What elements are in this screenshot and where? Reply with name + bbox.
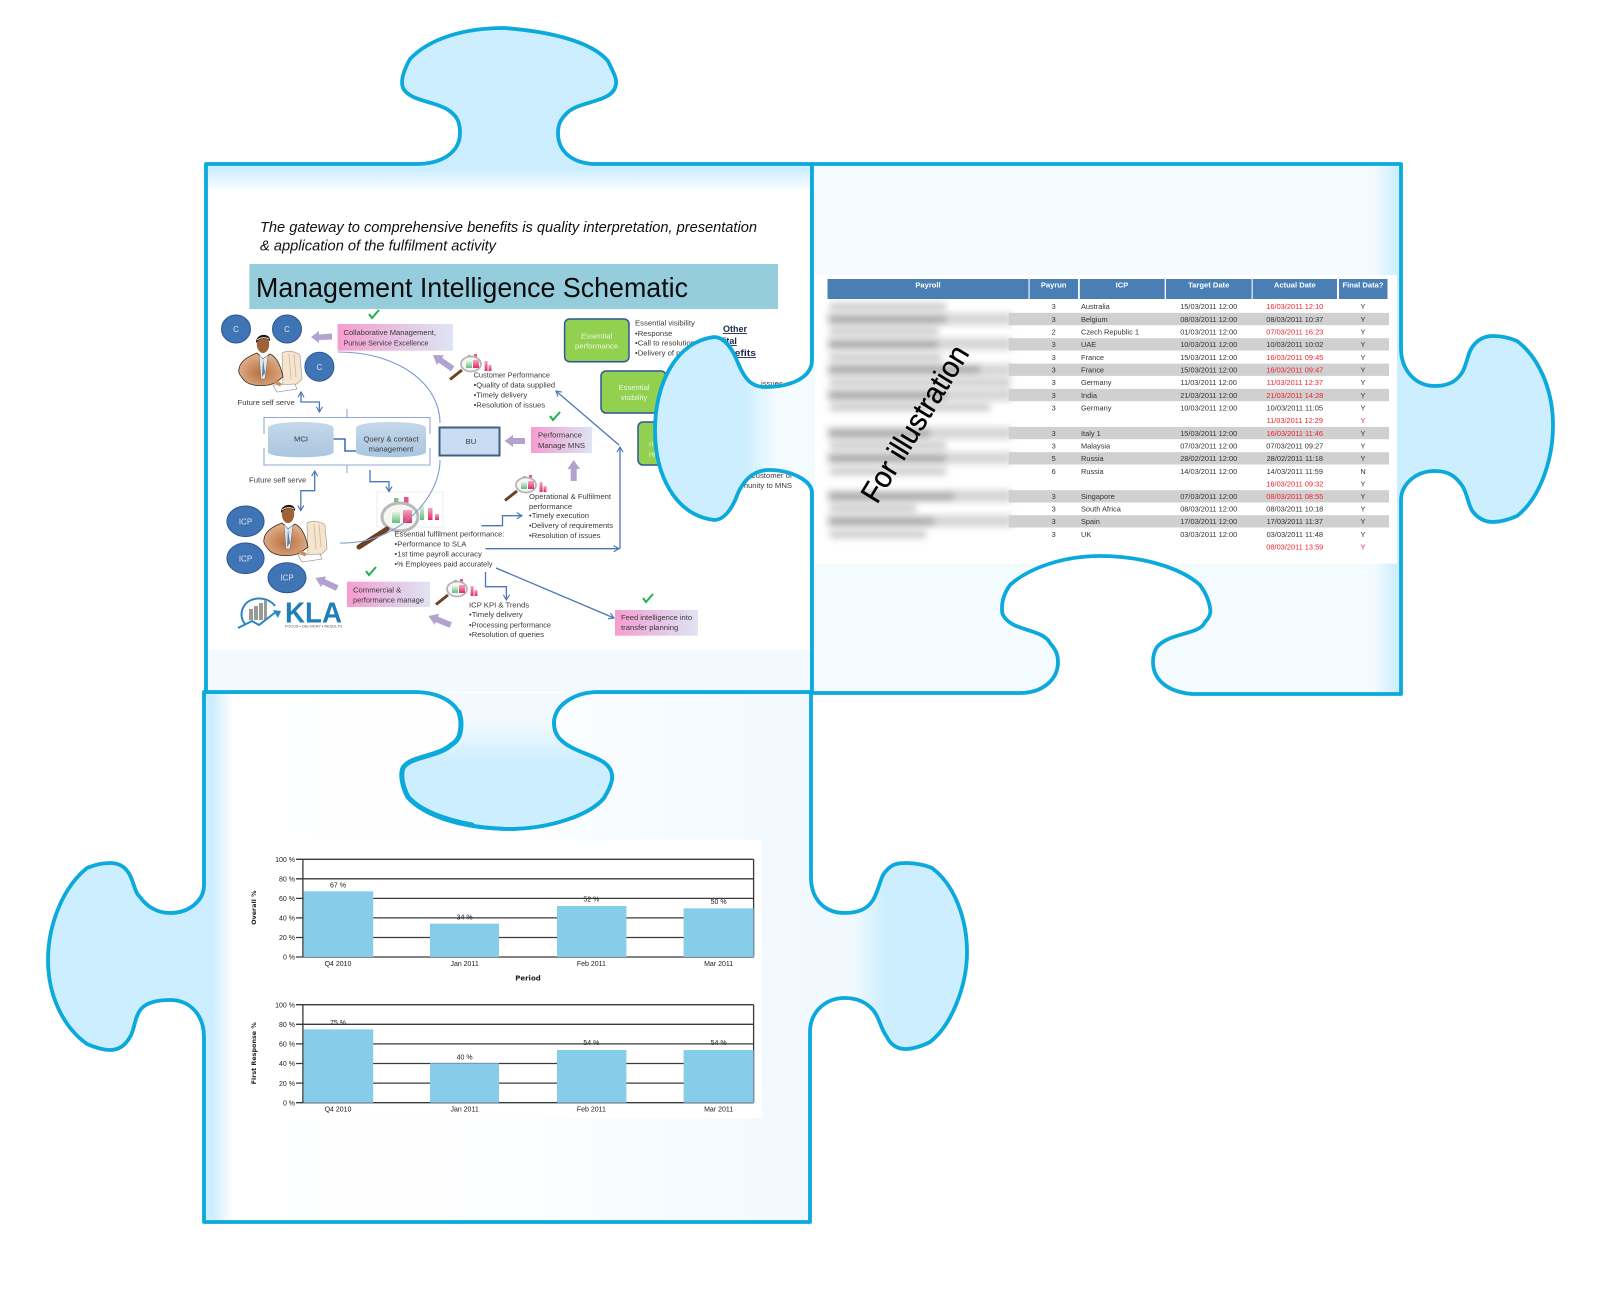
- value labels: 34 %: [457, 914, 473, 921]
- C circles: C: [233, 325, 239, 334]
- text: operational and fulfilment: •Delivery of requirements: [529, 521, 613, 530]
- table rows: Y: [1361, 391, 1366, 400]
- table rows: 3: [1052, 315, 1056, 324]
- y axis labels: 0 %: [283, 955, 295, 962]
- chart: Overall %: [250, 857, 754, 982]
- green box: essential visibility: visibility: [621, 393, 647, 402]
- box: commercial and performance manage: [347, 582, 430, 607]
- table rows: Italy 1: [1081, 429, 1101, 438]
- table rows: 16/03/2011 09:32: [1266, 480, 1323, 488]
- piece body: bottom: [48, 692, 967, 1222]
- table rows: 11/03/2011 12:00: [1180, 378, 1237, 387]
- table rows: Y: [1361, 328, 1366, 336]
- outline: table piece: [655, 164, 1553, 694]
- table rows: 21/03/2011 14:28: [1266, 391, 1323, 400]
- arrow: customer performance to collaborative: [430, 350, 456, 374]
- value labels: 54 %: [583, 1040, 599, 1047]
- white panel behind table: [815, 275, 1397, 564]
- category labels: Feb 2011: [577, 1107, 606, 1114]
- slide heading sentence: The gateway to comprehensive benefits is quality interpretation, presentation: [260, 220, 757, 236]
- slide heading sentence: & application of the fulfilment activity: [260, 238, 498, 254]
- table rows: Y: [1361, 442, 1366, 450]
- table rows: Singapore: [1081, 492, 1115, 501]
- table rows: Australia: [1081, 302, 1111, 311]
- table rows: 14/03/2011 12:00: [1180, 467, 1237, 476]
- blurred payroll names: [827, 303, 1012, 538]
- table rows: 08/03/2011 08:55: [1266, 492, 1323, 501]
- y axis labels: [275, 857, 295, 962]
- table rows: 11/03/2011 12:29: [1267, 416, 1323, 425]
- blue arrows: flow lines: [301, 391, 620, 618]
- table rows: 16/03/2011 12:10: [1266, 302, 1323, 311]
- data store: MCI: MCI: [294, 435, 308, 444]
- table rows: 16/03/2011 09:45: [1266, 353, 1323, 362]
- text: partly hidden notes: community to MNS: [727, 481, 792, 490]
- green box: partly hidden: [638, 422, 703, 465]
- table rows: 08/03/2011 12:00: [1180, 504, 1237, 514]
- y axis labels: [275, 1002, 295, 1107]
- value labels: [330, 882, 727, 921]
- piece body: schematic: [206, 28, 812, 692]
- text: operational and fulfilment: Operational & Fulfilment: [529, 492, 612, 501]
- y axis labels: 20 %: [279, 1081, 295, 1088]
- gridlines: [296, 1005, 754, 1103]
- box: feed intelligence: transfer planning: [621, 623, 678, 632]
- y axis labels: 100 %: [275, 857, 295, 864]
- value labels: 54 %: [711, 1040, 727, 1047]
- table rows: 3: [1052, 504, 1056, 514]
- arrow: operational to performance manage: [567, 460, 580, 481]
- icon: magnified chart (operational): [505, 473, 549, 500]
- table rows: 3: [1052, 366, 1056, 374]
- table rows: 5: [1052, 454, 1056, 463]
- table rows: Germany: [1081, 378, 1112, 387]
- table rows: 03/03/2011 12:00: [1180, 530, 1237, 539]
- text: partly hidden notes: issues: [761, 379, 783, 388]
- value labels: 52 %: [583, 897, 599, 904]
- table rows: 2: [1052, 328, 1056, 336]
- table rows: 08/03/2011 12:00: [1180, 315, 1237, 324]
- table rows: Czech Republic 1: [1081, 328, 1139, 336]
- table rows: Y: [1361, 302, 1366, 311]
- arrow: commercial to ICP: [313, 573, 340, 594]
- text: other vital benefits: Other: [723, 324, 748, 334]
- table rows: 07/03/2011 12:00: [1180, 442, 1237, 450]
- connector between data stores: [334, 439, 356, 451]
- tab fill reaching down from the schematic piece: [402, 693, 612, 829]
- table header: Target Date: [1188, 280, 1229, 290]
- arrow: future self serve to data store: [301, 392, 319, 412]
- text: ICP KPI and trends: ICP KPI & Trends: [469, 600, 529, 609]
- text: other vital benefits: Benefits: [715, 348, 756, 358]
- table rows: Y: [1361, 378, 1366, 387]
- y axis labels: 100 %: [275, 1002, 295, 1009]
- y axis labels: 40 %: [279, 1061, 295, 1068]
- table rows: Malaysia: [1081, 442, 1111, 450]
- icon: person at computer (top): [239, 335, 302, 392]
- category labels: Jan 2011: [450, 1107, 479, 1114]
- green box: partly hidden: re: [649, 450, 656, 459]
- table rows: 3: [1052, 429, 1056, 438]
- data store: MCI: [268, 422, 334, 457]
- text: essential visibility list: •Call to resolution: [635, 339, 695, 348]
- text: customer performance: •Resolution of issues: [474, 400, 545, 409]
- box: performance manage MNS: Manage MNS: [538, 441, 585, 450]
- green box: essential visibility: [601, 371, 666, 413]
- table rows: 3: [1052, 391, 1056, 400]
- table rows: Russia: [1081, 454, 1104, 463]
- table rows: 16/03/2011 11:46: [1267, 429, 1323, 438]
- table rows: Y: [1361, 353, 1366, 362]
- bars: [304, 1029, 754, 1103]
- table rows: 3: [1052, 353, 1056, 362]
- table rows: 08/03/2011 10:18: [1266, 504, 1323, 514]
- slide title: Management Intelligence Schematic: [256, 272, 688, 303]
- value labels: 75 %: [330, 1020, 346, 1027]
- text: customer performance: Customer Performance: [474, 371, 550, 380]
- category labels: Jan 2011: [450, 961, 479, 968]
- value labels: 50 %: [711, 899, 727, 906]
- curved link: [338, 352, 440, 543]
- text: ICP KPI and trends: •Timely delivery: [469, 610, 523, 619]
- table rows: 28/02/2011 11:18: [1267, 454, 1323, 463]
- logo: KLA: KLA: [285, 598, 342, 630]
- green box: essential performance: Essential: [581, 331, 612, 340]
- icon: person at computer (lower): [264, 505, 327, 562]
- table rows: Y: [1361, 416, 1366, 425]
- table rows: 17/03/2011 12:00: [1180, 517, 1237, 526]
- puzzle piece: payroll table: [655, 164, 1553, 694]
- table rows: Y: [1361, 542, 1366, 552]
- y axis labels: 60 %: [279, 1042, 295, 1049]
- outline: bottom piece: [48, 692, 967, 1222]
- BU box: BU: [466, 437, 476, 446]
- ICP circles: ICP: [239, 554, 252, 563]
- puzzle piece: management intelligence schematic: [204, 28, 812, 829]
- table rows: Y: [1361, 404, 1366, 412]
- ICP circles: ICP: [280, 574, 294, 583]
- table rows: France: [1081, 366, 1104, 374]
- table rows: 08/03/2011 10:37: [1266, 315, 1323, 324]
- gridlines: [296, 859, 754, 957]
- table rows: 3: [1052, 530, 1056, 539]
- box: performance manage MNS: Performance: [538, 431, 582, 440]
- box: commercial and performance manage: performance manage: [353, 595, 424, 604]
- box: collaborative management: Pursue Service Excellence: [344, 338, 428, 347]
- text: essential visibility list: Essential visibility: [635, 319, 695, 328]
- text: other vital benefits: Vital: [718, 336, 737, 346]
- green box: essential visibility: Essential: [618, 383, 650, 392]
- table rows: UK: [1081, 530, 1091, 539]
- arrow: performance manage to BU: [504, 435, 525, 447]
- value labels: [330, 1020, 727, 1061]
- table rows: N: [1360, 467, 1366, 476]
- logo: KLA: FOCUS ▪ DELIVERY ▪ RESULTS: [285, 624, 342, 628]
- text: partly hidden notes: Customer of: [750, 471, 793, 480]
- C circles: C: [284, 325, 290, 334]
- outline: schematic piece: [206, 28, 812, 692]
- bars: [304, 891, 754, 957]
- category labels: Mar 2011: [704, 961, 733, 968]
- check mark: [550, 412, 560, 420]
- box: performance manage MNS: [531, 427, 592, 453]
- table rows: Y: [1361, 340, 1366, 349]
- table rows: 21/03/2011 12:00: [1180, 391, 1237, 400]
- pale strip under the slide: [206, 650, 812, 692]
- data store: query and contact management: Query & contact: [363, 435, 419, 444]
- text: essential visibility list: •Delivery of performance: [635, 349, 719, 358]
- text: customer performance: •Quality of data supplied: [474, 381, 555, 390]
- category labels: Q4 2010: [325, 961, 352, 968]
- y axis labels: 40 %: [279, 916, 295, 923]
- table rows: 3: [1052, 492, 1056, 501]
- piece body: table: [655, 164, 1553, 694]
- watermark: for illustration: For illustration: [855, 340, 976, 509]
- table rows: 03/03/2011 11:48: [1267, 530, 1323, 539]
- category labels: [325, 1107, 733, 1114]
- value labels: 67 %: [330, 882, 346, 889]
- payroll table: [827, 279, 1389, 552]
- title band: [249, 264, 778, 309]
- table rows: 10/03/2011 12:00: [1180, 340, 1237, 349]
- table rows: 14/03/2011 11:59: [1267, 467, 1323, 476]
- table rows: Y: [1361, 366, 1366, 374]
- alternating grey rows: [1009, 313, 1389, 528]
- table rows: 15/03/2011 12:00: [1180, 429, 1237, 438]
- chart panel: [248, 840, 762, 1118]
- table rows: 3: [1052, 404, 1056, 412]
- table rows: Y: [1361, 517, 1366, 526]
- table header: Final Data?: [1343, 280, 1384, 290]
- y axis labels: 60 %: [279, 896, 295, 903]
- text: essential fulfilment performance: •Performance to SLA: [394, 540, 467, 549]
- table rows: Y: [1361, 530, 1366, 539]
- text: operational and fulfilment: •Timely execution: [529, 511, 589, 520]
- table rows: Germany: [1081, 404, 1112, 412]
- table rows: 15/03/2011 12:00: [1180, 366, 1237, 374]
- table rows: Y: [1361, 492, 1366, 501]
- table header: Payrun: [1041, 280, 1067, 290]
- category labels: Q4 2010: [325, 1107, 352, 1114]
- category labels: Feb 2011: [577, 961, 606, 968]
- table rows: Y: [1361, 429, 1366, 438]
- table rows: 3: [1052, 378, 1056, 387]
- label: future self serve (top): Future self serve: [238, 398, 295, 407]
- box: feed intelligence: [615, 610, 698, 636]
- table rows: 10/03/2011 10:02: [1266, 340, 1323, 349]
- table rows: Y: [1361, 315, 1366, 324]
- arrow: ICP KPI to commercial: [426, 610, 453, 631]
- green box: essential performance: performance: [575, 341, 618, 350]
- table rows: Belgium: [1081, 315, 1108, 324]
- table rows: 17/03/2011 11:37: [1267, 517, 1323, 526]
- table rows: 3: [1052, 340, 1056, 349]
- ICP circles: [227, 506, 306, 593]
- green box: partly hidden: ri: [649, 440, 654, 449]
- box: commercial and performance manage: Commercial &: [353, 585, 401, 594]
- icon: magnified chart (customer): [450, 352, 494, 380]
- y axis labels: 0 %: [283, 1100, 295, 1107]
- arrow: collaborative to C: [311, 331, 332, 343]
- table rows: 3: [1052, 517, 1056, 526]
- table header: Payroll: [915, 280, 941, 290]
- text: operational and fulfilment: performance: [529, 502, 572, 511]
- table rows: [1052, 302, 1366, 552]
- table rows: Y: [1361, 480, 1366, 488]
- text: ICP KPI and trends: •Processing performance: [469, 620, 551, 629]
- check mark: [643, 594, 653, 602]
- table rows: 08/03/2011 13:59: [1266, 542, 1323, 552]
- axis title: Period: Period: [515, 974, 541, 982]
- bracket around data stores: [264, 409, 430, 473]
- icon: magnified chart (ICP): [436, 577, 480, 604]
- table rows: India: [1081, 391, 1098, 400]
- table rows: 28/02/2011 12:00: [1180, 454, 1237, 463]
- table rows: 07/03/2011 12:00: [1180, 492, 1237, 501]
- logo: KLA: [238, 598, 342, 630]
- BU box: [440, 428, 500, 456]
- table rows: France: [1081, 353, 1104, 362]
- axis title: First Response %: First Response %: [250, 1022, 258, 1084]
- box: collaborative management: [338, 324, 453, 351]
- table rows: 10/03/2011 12:00: [1180, 404, 1237, 412]
- check mark: [366, 567, 376, 575]
- text: essential fulfilment performance: Essential fulfilment performance:: [394, 530, 504, 539]
- C circles: C: [317, 363, 323, 372]
- box: feed intelligence: Feed intelligence into: [621, 613, 692, 622]
- chart: First Response %: [250, 1002, 754, 1114]
- text: operational and fulfilment: •Resolution of issues: [529, 531, 601, 540]
- puzzle piece: bottom charts: [48, 692, 967, 1222]
- y axis labels: 80 %: [279, 876, 295, 884]
- data store: query and contact management: [356, 422, 426, 457]
- table rows: Russia: [1081, 467, 1104, 476]
- table rows: Y: [1361, 454, 1366, 463]
- table rows: Spain: [1081, 517, 1100, 526]
- table rows: 6: [1052, 467, 1056, 476]
- table rows: 10/03/2011 11:05: [1267, 404, 1323, 412]
- axis title: Overall %: Overall %: [250, 890, 258, 925]
- table header: ICP: [1116, 280, 1128, 290]
- table rows: 11/03/2011 12:37: [1267, 378, 1323, 387]
- table rows: 15/03/2011 12:00: [1180, 353, 1237, 362]
- table rows: 3: [1052, 302, 1056, 311]
- value labels: 40 %: [457, 1054, 473, 1061]
- outline: shared seam and tab: [204, 692, 811, 829]
- table header: [828, 279, 1388, 299]
- table rows: 16/03/2011 09:47: [1266, 366, 1323, 374]
- table rows: 01/03/2011 12:00: [1180, 328, 1237, 336]
- table header: Actual Date: [1274, 280, 1316, 290]
- icon: magnifying glass over chart: [359, 492, 443, 547]
- text: essential fulfilment performance: •1st time payroll accuracy: [394, 550, 482, 559]
- ICP circles: ICP: [239, 517, 252, 526]
- data store: query and contact management: management: [369, 445, 414, 454]
- text: ICP KPI and trends: •Resolution of queries: [469, 630, 544, 639]
- table rows: 07/03/2011 16:23: [1266, 328, 1323, 336]
- check mark: [369, 310, 379, 318]
- text: essential visibility list: •Response: [635, 329, 672, 338]
- outline: thicker left side of tab: [402, 712, 472, 825]
- text: customer performance: •Timely delivery: [474, 391, 527, 400]
- category labels: [325, 961, 733, 968]
- table rows: 15/03/2011 12:00: [1180, 302, 1237, 311]
- green box: essential performance: [565, 319, 629, 362]
- table rows: 3: [1052, 442, 1056, 450]
- text: essential fulfilment performance: •% Employees paid accurately: [394, 560, 493, 569]
- y axis labels: 80 %: [279, 1022, 295, 1029]
- box: collaborative management: Collaborative Management,: [344, 328, 436, 337]
- category labels: Mar 2011: [704, 1107, 733, 1114]
- label: future self serve (lower): Future self serve: [249, 476, 306, 485]
- table rows: UAE: [1081, 340, 1096, 349]
- table rows: Y: [1361, 504, 1366, 514]
- table rows: 07/03/2011 09:27: [1266, 442, 1323, 450]
- C circles: [222, 315, 334, 381]
- y axis labels: 20 %: [279, 935, 295, 942]
- table rows: South Africa: [1081, 504, 1122, 514]
